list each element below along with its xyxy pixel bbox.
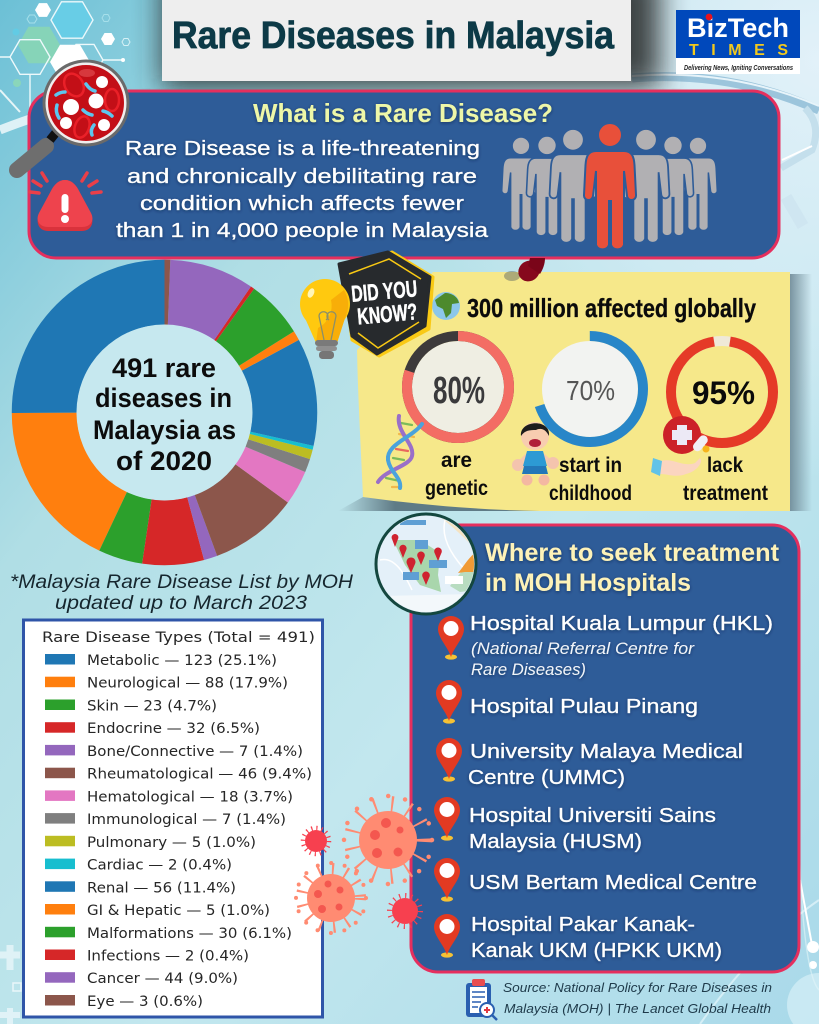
legend: rare disease types xyxy=(24,620,322,1017)
icon: push pin xyxy=(504,256,545,286)
logo: BizTech Times xyxy=(676,10,800,74)
source note xyxy=(503,980,772,1016)
hospital: HKL: Hospital Kuala Lumpur (HKL) xyxy=(470,612,773,635)
icon: group of people xyxy=(502,123,717,249)
badge: did you know: DID YOU xyxy=(350,275,418,307)
chart footnote: *Malaysia Rare Disease List by MOH xyxy=(10,571,354,593)
source note: Source: National Policy for Rare Diseases in xyxy=(503,980,772,995)
donut centre label xyxy=(93,353,236,476)
ring: 95 percent lack treatment: lack xyxy=(707,454,743,477)
legend: rare disease types: Malformations — 30 (6.1%) xyxy=(87,926,292,942)
hospital: HUSM: Malaysia (HUSM) xyxy=(469,830,642,853)
icon: hand holding medicine xyxy=(651,416,710,476)
panel: did you know sticky note xyxy=(338,256,812,511)
hospital: USM Bertam: USM Bertam Medical Centre xyxy=(469,871,757,894)
stat headline: 300 million affected globally xyxy=(467,293,756,323)
icon: dna helix xyxy=(378,416,422,488)
definition text: and chronically debilitating rare xyxy=(127,165,477,188)
heading: where to seek treatment: in MOH Hospitals xyxy=(485,569,691,597)
hospital list xyxy=(468,612,773,962)
virus: medium xyxy=(296,863,366,933)
hospital: HKL: Rare Diseases) xyxy=(471,661,586,679)
icon: globe xyxy=(432,292,460,320)
icon: hospital map of Malaysia xyxy=(376,514,476,614)
legend: rare disease types: Hematological — 18 (3.7%) xyxy=(87,789,293,805)
icon: crying child xyxy=(512,422,559,486)
ring: 80 percent genetic: 80% xyxy=(433,370,485,412)
hospital: HUSM xyxy=(469,804,716,853)
legend: rare disease types: Renal — 56 (11.4%) xyxy=(87,880,236,896)
legend: rare disease types: Skin — 23 (4.7%) xyxy=(87,698,217,714)
chart footnote: updated up to March 2023 xyxy=(55,592,307,614)
definition text: than 1 in 4,000 people in Malaysia xyxy=(116,219,489,242)
title banner xyxy=(162,0,660,88)
logo: BizTech Times: Delivering News, Igniting Conversations xyxy=(684,65,793,72)
ring: 80 percent genetic xyxy=(407,336,509,500)
legend: rare disease types: Endocrine — 32 (6.5%) xyxy=(87,721,260,737)
legend: rare disease types: Bone/Connective — 7 (1.4%) xyxy=(87,744,303,760)
panel: what is a rare disease xyxy=(29,91,779,258)
ring: 70 percent childhood: childhood xyxy=(549,482,632,505)
definition text: condition which affects fewer xyxy=(140,192,464,215)
icon: light bulb xyxy=(300,279,350,359)
ring: 70 percent childhood: start in xyxy=(559,454,622,477)
hospital: UMMC xyxy=(468,740,743,789)
hospital: HPKK UKM: Hospital Pakar Kanak- xyxy=(471,913,695,936)
virus: small red left xyxy=(303,828,329,854)
hospital: HPKK UKM: Kanak UKM (HPKK UKM) xyxy=(471,939,722,962)
hospital: UMMC: Centre (UMMC) xyxy=(468,766,625,789)
legend: rare disease types: Infections — 2 (0.4%) xyxy=(87,948,249,964)
logo: BizTech Times: TIMES xyxy=(689,42,788,59)
legend: rare disease types: Cardiac — 2 (0.4%) xyxy=(87,858,232,874)
legend: rare disease types: Immunological — 7 (1.4%) xyxy=(87,812,286,828)
ring: 80 percent genetic: genetic xyxy=(425,477,488,500)
hospital: UMMC: University Malaya Medical xyxy=(470,740,743,763)
hospital: HKL: (National Referral Centre for xyxy=(471,640,696,658)
legend: rare disease types: Cancer — 44 (9.0%) xyxy=(87,971,238,987)
definition text: Rare Disease is a life-threatening xyxy=(125,137,480,160)
legend: rare disease types: Rheumatological — 46 (9.4%) xyxy=(87,767,312,783)
title banner: Rare Diseases in Malaysia xyxy=(172,15,615,57)
icon: clipboard and magnifier xyxy=(466,979,497,1020)
icon: virus cluster xyxy=(296,796,432,933)
ring: 70 percent childhood: 70% xyxy=(566,375,615,406)
decorative hexagons xyxy=(0,2,130,110)
virus: small red right xyxy=(390,896,420,926)
donut centre label: of 2020 xyxy=(116,446,212,476)
chart footnote xyxy=(10,571,354,614)
legend: rare disease types: Neurological — 88 (17.9%) xyxy=(87,676,288,692)
heading: where to seek treatment: Where to seek treatment xyxy=(485,539,780,567)
ring: 70 percent childhood xyxy=(537,336,643,505)
location pins xyxy=(434,616,464,958)
logo: BizTech Times: BizTech xyxy=(687,13,789,43)
heading: where to seek treatment xyxy=(485,539,780,597)
donut centre label: diseases in xyxy=(95,383,232,413)
icon: magnifying glass with blood cells xyxy=(17,61,128,170)
donut centre label: Malaysia as xyxy=(93,415,236,445)
virus: large xyxy=(344,796,432,884)
ring: 95 percent lack treatment: 95% xyxy=(692,375,755,411)
source note: Malaysia (MOH) | The Lancet Global Health xyxy=(504,1001,771,1016)
legend: rare disease types: Metabolic — 123 (25.1%) xyxy=(87,653,277,669)
icon: warning triangle xyxy=(30,173,101,231)
hospital: HPKK UKM xyxy=(471,913,722,962)
badge: did you know xyxy=(339,252,433,356)
definition text xyxy=(116,137,489,242)
donut chart xyxy=(44,292,285,533)
ring: 95 percent lack treatment xyxy=(671,341,773,505)
panel: where to seek treatment xyxy=(411,525,799,972)
hospital: Pulau Pinang: Hospital Pulau Pinang xyxy=(470,695,698,718)
badge: did you know: KNOW? xyxy=(356,298,418,329)
ring: 80 percent genetic: are xyxy=(441,449,472,472)
legend: rare disease types: Rare Disease Types (Total = 491) xyxy=(42,630,315,646)
hospital: HKL xyxy=(470,612,773,679)
ring: 95 percent lack treatment: treatment xyxy=(683,482,768,505)
legend: rare disease types: Eye — 3 (0.6%) xyxy=(87,994,203,1010)
hospital: HUSM: Hospital Universiti Sains xyxy=(469,804,716,827)
legend: rare disease types: GI & Hepatic — 5 (1.0%) xyxy=(87,903,270,919)
legend: rare disease types: Pulmonary — 5 (1.0%) xyxy=(87,835,256,851)
heading: what is a rare disease: What is a Rare Disease? xyxy=(253,98,553,128)
donut centre label: 491 rare xyxy=(112,353,216,383)
